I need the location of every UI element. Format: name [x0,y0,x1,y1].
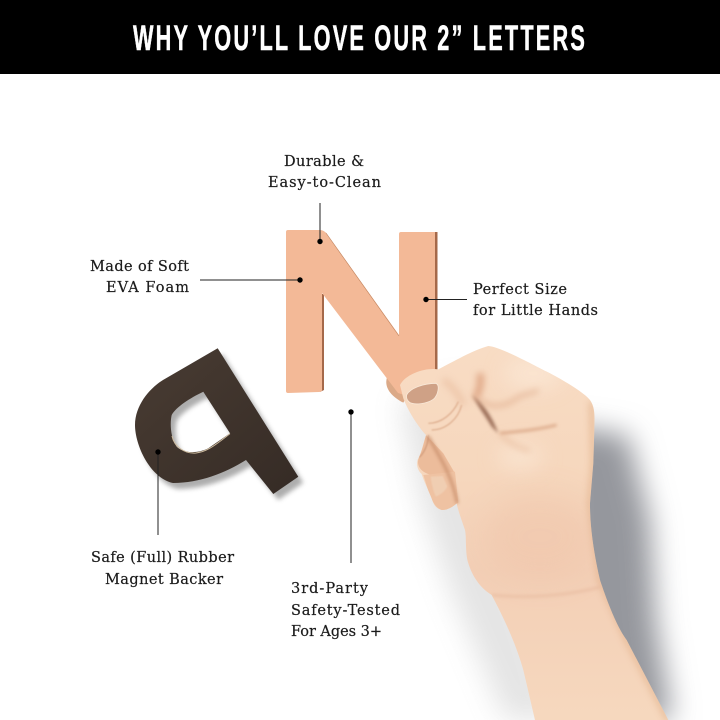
thumb crook shadow [473,395,498,433]
leader line [319,203,321,241]
letter body [135,348,298,494]
hole inner edge [172,434,230,453]
callout: rubber magnet backer [91,449,234,588]
callout: safety tested: For Ages 3+ [291,624,382,640]
callout: safety tested: Safety-Tested [291,603,400,619]
letter N [286,230,438,400]
thumbnail [406,383,438,404]
wrist crease [492,587,602,597]
callout: soft EVA foam [90,259,303,296]
lower finger [423,472,458,510]
palm fold [500,425,557,433]
label text: Made of Soft [90,259,189,275]
letter N face [286,230,435,400]
thumb pad shading [443,380,463,405]
callout: safety tested [291,409,400,640]
thumb crease [428,402,462,430]
lower fingernail [431,476,447,497]
label text: 3rd-Party [291,581,369,597]
right edge shading [590,402,668,720]
callout: rubber magnet backer: Magnet Backer [105,572,223,588]
upper finger nail edge [419,435,428,457]
letter N diagonal edge [326,233,399,336]
leader line [200,279,300,281]
finger under thumb [418,435,455,476]
callout: soft EVA foam: EVA Foam [106,280,189,296]
letter shadow [140,354,303,500]
finger shadow under thumb [428,437,457,503]
callout: durable and easy-to-clean: Easy-to-Clean [268,175,381,191]
leader line [350,412,352,563]
letter N side edge [320,232,438,392]
callout: perfect size: for Little Hands [473,303,598,319]
hand: palm, thumb and wrist [400,346,668,720]
label text: Safe (Full) Rubber [91,550,234,566]
palm shading [510,511,569,542]
hand: back finger [386,373,413,403]
callout: durable and easy-to-clean [268,154,381,244]
hand cast shadow [400,380,672,720]
label text: Durable & [284,154,364,170]
label text: Perfect Size [473,282,567,298]
leader line [426,298,467,300]
icon: magnet backer letter P [135,348,303,500]
leader line [157,452,159,535]
index finger fold [478,390,538,406]
header banner [0,0,720,74]
callout: perfect size [423,282,598,319]
